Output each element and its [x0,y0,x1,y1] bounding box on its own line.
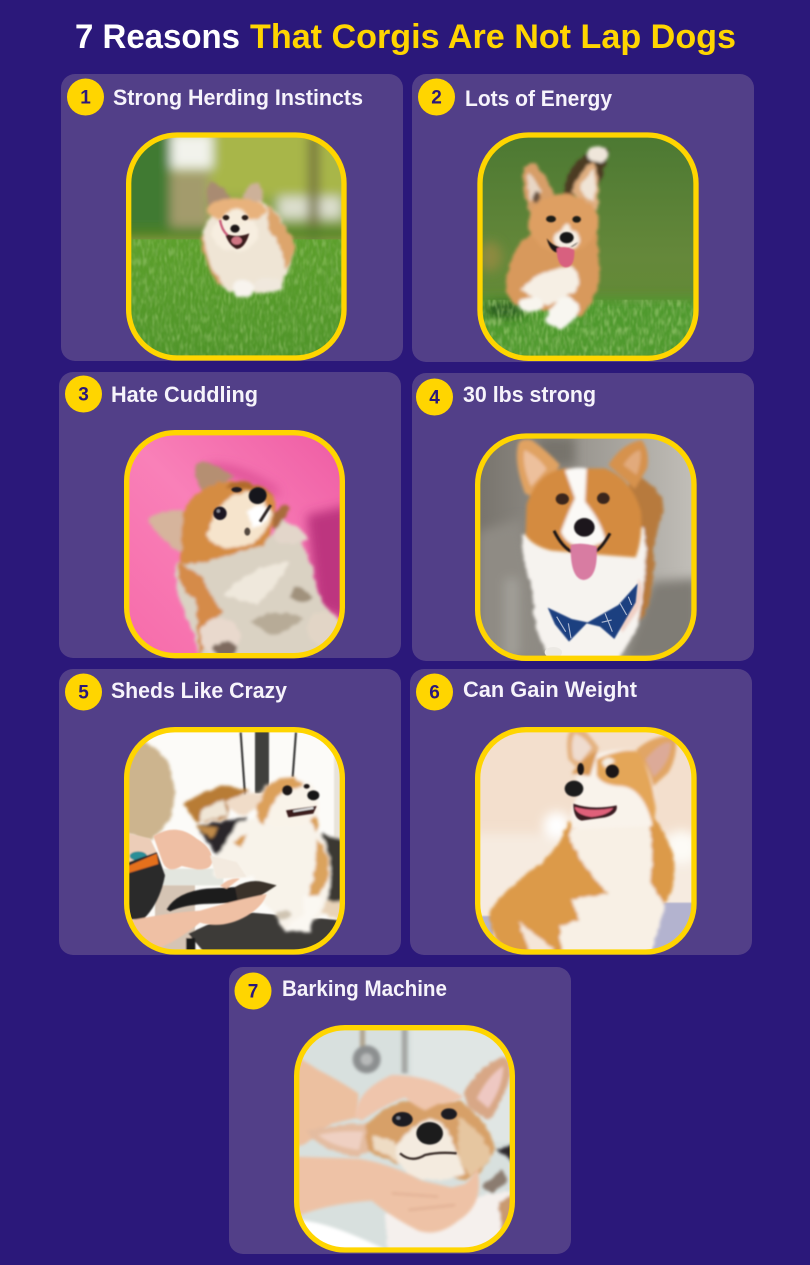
number badge 7 [234,972,272,1010]
photo frame 7 [297,1028,512,1250]
number badge 2: 2 [431,88,442,108]
number badge 1: 1 [80,88,91,108]
corgi paws [544,647,562,656]
photo frame 3 [127,433,342,656]
number badge 5: 5 [78,682,89,704]
heading 6: Can Gain Weight [463,677,638,702]
number badge 3 [65,376,102,412]
number badge 5 [65,674,102,710]
photo 6: corgi sitting on a light background [472,725,702,959]
heading 7: Barking Machine [282,976,447,1001]
number badge 6: 6 [429,682,440,704]
photo frame 1 [129,135,344,358]
photo frame 6 [478,730,694,952]
panel 3: Hate Cuddling [59,372,401,662]
photo 2: corgi bounding through grass [475,130,702,363]
number badge 2 [418,78,455,116]
panel 1: Strong Herding Instincts [61,74,403,363]
heading 2: Lots of Energy [465,86,613,111]
photo 5: groomer blow-drying a corgi [120,725,347,959]
number badge 4 [416,378,453,416]
title: That Corgis Are Not Lap Dogs [250,18,736,56]
panel 7: Barking Machine [229,967,571,1257]
number badge 3: 3 [78,384,89,406]
panel 2: Lots of Energy [412,74,754,363]
panel 6: Can Gain Weight [410,669,752,959]
photo frame 2 [480,135,696,358]
photo frame 4 [478,436,694,658]
photo frame 5 [127,730,342,952]
photo 4: corgi with blue bow tie [472,432,702,662]
number badge 7: 7 [248,982,258,1002]
number badge 1 [67,78,104,116]
heading 3: Hate Cuddling [111,382,258,407]
photo 1: corgi running on grass [126,132,347,361]
panel 4: 30 lbs strong [412,373,754,662]
photo 3: corgi lying on pink background [120,428,350,662]
panel 5: Sheds Like Crazy [59,669,401,959]
number badge 4: 4 [429,388,440,408]
title: 7 Reasons [75,18,240,56]
heading 5: Sheds Like Crazy [111,678,288,703]
number badge 6 [416,674,453,710]
heading 1: Strong Herding Instincts [113,85,363,110]
heading 4: 30 lbs strong [463,382,596,407]
photo 7: corgi being washed [292,1023,518,1257]
